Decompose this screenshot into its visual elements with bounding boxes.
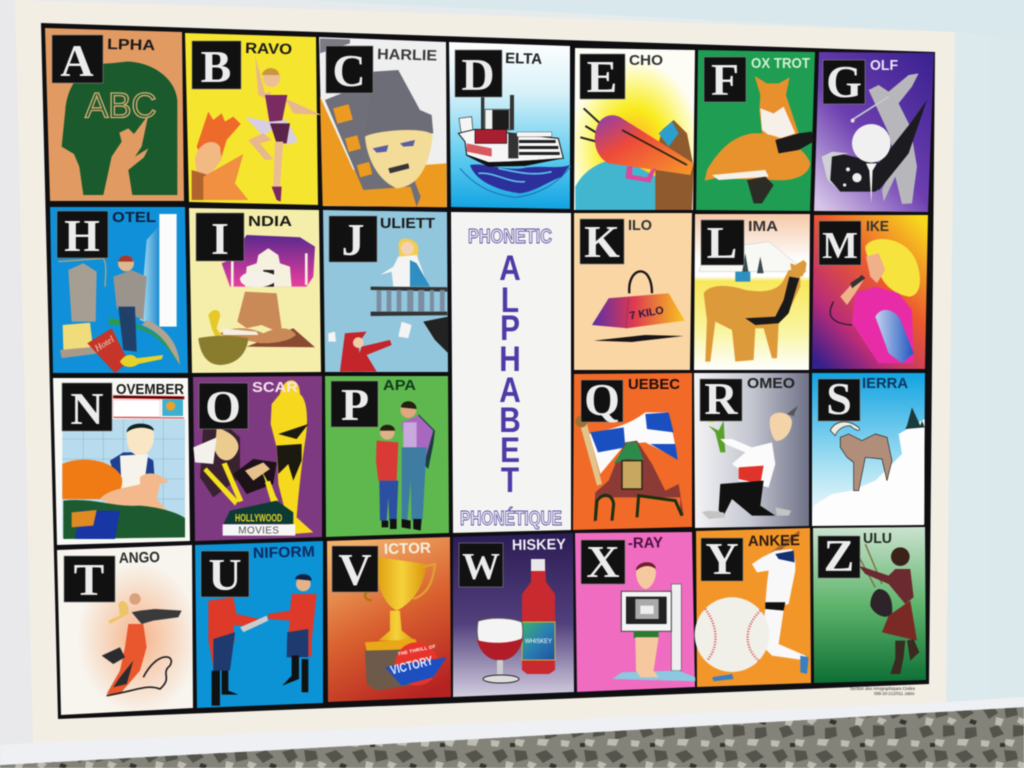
panel: X-Ray bbox=[575, 532, 695, 692]
panel: Fox Trot bbox=[696, 50, 815, 211]
panel: November bbox=[53, 378, 190, 545]
label: Mike: IKE bbox=[866, 218, 889, 235]
letter badge N: N bbox=[70, 383, 104, 434]
illustration: applauding hands and ballerina bbox=[192, 55, 322, 202]
illustration: two foxes bbox=[705, 76, 814, 203]
panel: Tango bbox=[57, 545, 193, 715]
label: Echo: CHO bbox=[629, 52, 663, 69]
heading: Alphabet (vertical): T bbox=[501, 461, 519, 500]
label: X-Ray: -RAY bbox=[628, 534, 663, 552]
letter badge L: L bbox=[707, 217, 737, 268]
panel: Papa bbox=[325, 376, 449, 537]
label: Bravo: RAVO bbox=[245, 40, 293, 58]
label: Victor: ICTOR bbox=[384, 540, 431, 558]
letter badge G: G bbox=[826, 56, 862, 107]
label: Golf: OLF bbox=[870, 57, 898, 74]
panel: Echo bbox=[574, 48, 695, 210]
letter badge P bbox=[331, 379, 378, 430]
panel: Lima bbox=[694, 214, 810, 370]
illustration: Oscar statue and film couple: MOVIES bbox=[238, 525, 279, 536]
panel: Sierra bbox=[812, 373, 925, 526]
illustration: baseball and batter bbox=[695, 531, 809, 681]
label: India: NDIA bbox=[248, 213, 292, 230]
label: November: OVEMBER bbox=[116, 381, 184, 398]
illustration: trophy with Victory banner: VICTORY bbox=[389, 653, 435, 678]
letter badge N bbox=[62, 383, 112, 434]
panel: Oscar bbox=[193, 376, 322, 541]
illustration: hotel, porter, luggage, key: Hotel bbox=[93, 335, 117, 355]
illustration: hotel, porter, luggage, key bbox=[58, 214, 180, 373]
label: Papa: APA bbox=[383, 377, 416, 394]
letter badge B bbox=[192, 41, 241, 92]
label: Whiskey: HISKEY bbox=[512, 536, 566, 554]
letter badge A bbox=[52, 35, 103, 86]
letter badge C: C bbox=[332, 45, 366, 96]
heading: Alphabet (vertical): E bbox=[500, 431, 520, 470]
letter badge V: V bbox=[338, 544, 372, 595]
illustration: man at x-ray machine bbox=[612, 562, 695, 681]
panel: Yankee bbox=[695, 528, 811, 687]
letter badge Y: Y bbox=[705, 533, 739, 584]
label: Yankee: ANKEE bbox=[748, 532, 800, 550]
letter badge R: R bbox=[704, 373, 738, 424]
letter badge S bbox=[818, 373, 860, 424]
letter badge E bbox=[580, 51, 625, 102]
letter badge P: P bbox=[341, 379, 369, 430]
heading: Alphabet (vertical): A bbox=[499, 371, 521, 410]
letter badge W: W bbox=[462, 546, 500, 588]
label: Uniform: NIFORM bbox=[253, 543, 315, 562]
letter badge T bbox=[64, 554, 115, 605]
panel: India bbox=[189, 208, 321, 373]
letter badge S: S bbox=[826, 373, 852, 424]
heading: Alphabet (vertical): B bbox=[499, 401, 521, 440]
heading: Alphabet (vertical) bbox=[499, 249, 521, 500]
label: Quebec: UEBEC bbox=[628, 376, 680, 393]
letter badge U bbox=[201, 549, 249, 600]
letter badge K: K bbox=[584, 216, 620, 267]
panel: Mike bbox=[812, 215, 928, 369]
illustration: Taj Mahal and snake charmer bbox=[198, 235, 315, 365]
illustration: whiskey bottle and glass: WHISKEY bbox=[525, 639, 552, 645]
letter badge I bbox=[196, 213, 244, 264]
letter badge I: I bbox=[211, 213, 229, 264]
illustration: head silhouette with chalk letters bbox=[62, 62, 177, 195]
panel: Whiskey bbox=[453, 533, 574, 697]
heading: Phonetic: PHONETIC bbox=[468, 226, 552, 248]
panel: Romeo bbox=[694, 373, 809, 528]
heading: Alphabet (vertical): A bbox=[499, 249, 521, 288]
label: Zulu: ULU bbox=[863, 530, 892, 547]
heading: Phonétique: PHONÉTIQUE bbox=[460, 507, 562, 530]
credit line bbox=[850, 686, 915, 696]
heading: Alphabet (vertical): P bbox=[500, 309, 520, 348]
illustration: two soldiers shaking hands bbox=[208, 574, 317, 706]
illustration: Quebec flag and Chateau bbox=[575, 412, 684, 522]
illustration: llama with mountains bbox=[699, 242, 807, 362]
panel: title bbox=[451, 212, 571, 533]
label: Lima: IMA bbox=[748, 218, 778, 235]
illustration: piper bbox=[852, 544, 919, 674]
illustration: one kilo weight: 7 KILO bbox=[629, 304, 665, 322]
heading: Alphabet (vertical): L bbox=[501, 281, 519, 320]
credit line: 099-20-212/011 Jabio bbox=[874, 691, 915, 696]
label: Oscar: SCAR bbox=[252, 379, 298, 396]
illustration: head silhouette with chalk letters: ABC bbox=[85, 86, 157, 125]
panel: Uniform bbox=[195, 541, 323, 708]
illustration: Oscar statue and film couple: HOLLYWOOD bbox=[235, 512, 282, 524]
panel: Quebec bbox=[573, 373, 692, 530]
panel: Zulu bbox=[813, 527, 926, 683]
letter badge Q: Q bbox=[584, 374, 620, 425]
illustration: bighorn sheep on snowy slope bbox=[812, 407, 925, 526]
letter badge E: E bbox=[587, 51, 617, 102]
panel: Bravo bbox=[185, 33, 322, 205]
panel: Victor bbox=[327, 537, 451, 702]
letter badge X: X bbox=[586, 536, 620, 587]
label: Romeo: OMEO bbox=[747, 375, 795, 392]
panel: Charlie bbox=[319, 37, 447, 207]
label: Tango: ANGO bbox=[119, 549, 160, 567]
label: Sierra: IERRA bbox=[862, 375, 908, 392]
illustration: riverboat on waves bbox=[458, 95, 571, 197]
panel: Kilo bbox=[574, 213, 692, 370]
label: Delta: ELTA bbox=[505, 50, 542, 68]
illustration: singer with microphone bbox=[830, 239, 920, 363]
illustration: tango dancers bbox=[102, 593, 182, 696]
letter badge H: H bbox=[64, 210, 100, 261]
letter badge Z: Z bbox=[824, 530, 854, 581]
letter badge U: U bbox=[208, 549, 242, 600]
illustration: trophy with Victory banner: THE THRILL OF bbox=[397, 644, 436, 657]
illustration: one kilo weight bbox=[592, 271, 685, 342]
illustration: balcony with Juliet and Romeo bbox=[328, 238, 448, 372]
label: Alpha: LPHA bbox=[107, 36, 156, 54]
illustration: Oscar statue and film couple bbox=[193, 380, 313, 536]
illustration: Charlie Chaplin and film strip bbox=[320, 38, 447, 207]
letter badge F bbox=[704, 54, 746, 105]
heading: Alphabet (vertical): H bbox=[499, 340, 521, 379]
credit line: Section des Arrographiques Civiles bbox=[850, 686, 915, 691]
letter badge D: D bbox=[461, 49, 495, 100]
label: Charlie: HARLIE bbox=[377, 46, 437, 65]
illustration: father and son bbox=[376, 401, 435, 531]
letter badge B: B bbox=[201, 41, 231, 92]
illustration: trophy with Victory banner bbox=[365, 557, 447, 691]
label: Juliett: ULIETT bbox=[380, 215, 435, 232]
letter badge J bbox=[329, 214, 377, 265]
panel: Hotel bbox=[50, 207, 188, 373]
letter badge A: A bbox=[60, 35, 94, 86]
illustration: whiskey bottle and glass bbox=[477, 559, 555, 683]
label: Fox Trot: OX TROT bbox=[751, 55, 810, 72]
illustration: golfer, ball and club bbox=[821, 73, 927, 204]
panel: Alpha bbox=[45, 28, 184, 201]
letter badge F: F bbox=[711, 54, 739, 105]
illustration: calendar with pilgrim and turkey bbox=[62, 396, 185, 539]
label: Kilo: ILO bbox=[628, 217, 652, 234]
illustration: kneeling man with flower bbox=[702, 406, 798, 519]
letter badge J: J bbox=[342, 214, 364, 265]
panel: Juliett bbox=[323, 210, 448, 372]
panel: Golf bbox=[814, 52, 934, 212]
panel: Delta bbox=[449, 42, 571, 209]
letter badge M: M bbox=[822, 225, 858, 267]
illustration: megaphone and mountains bbox=[575, 108, 694, 210]
letter badge T: T bbox=[74, 554, 104, 605]
letter badge O: O bbox=[205, 381, 241, 432]
label: Hotel: OTEL bbox=[112, 209, 156, 226]
